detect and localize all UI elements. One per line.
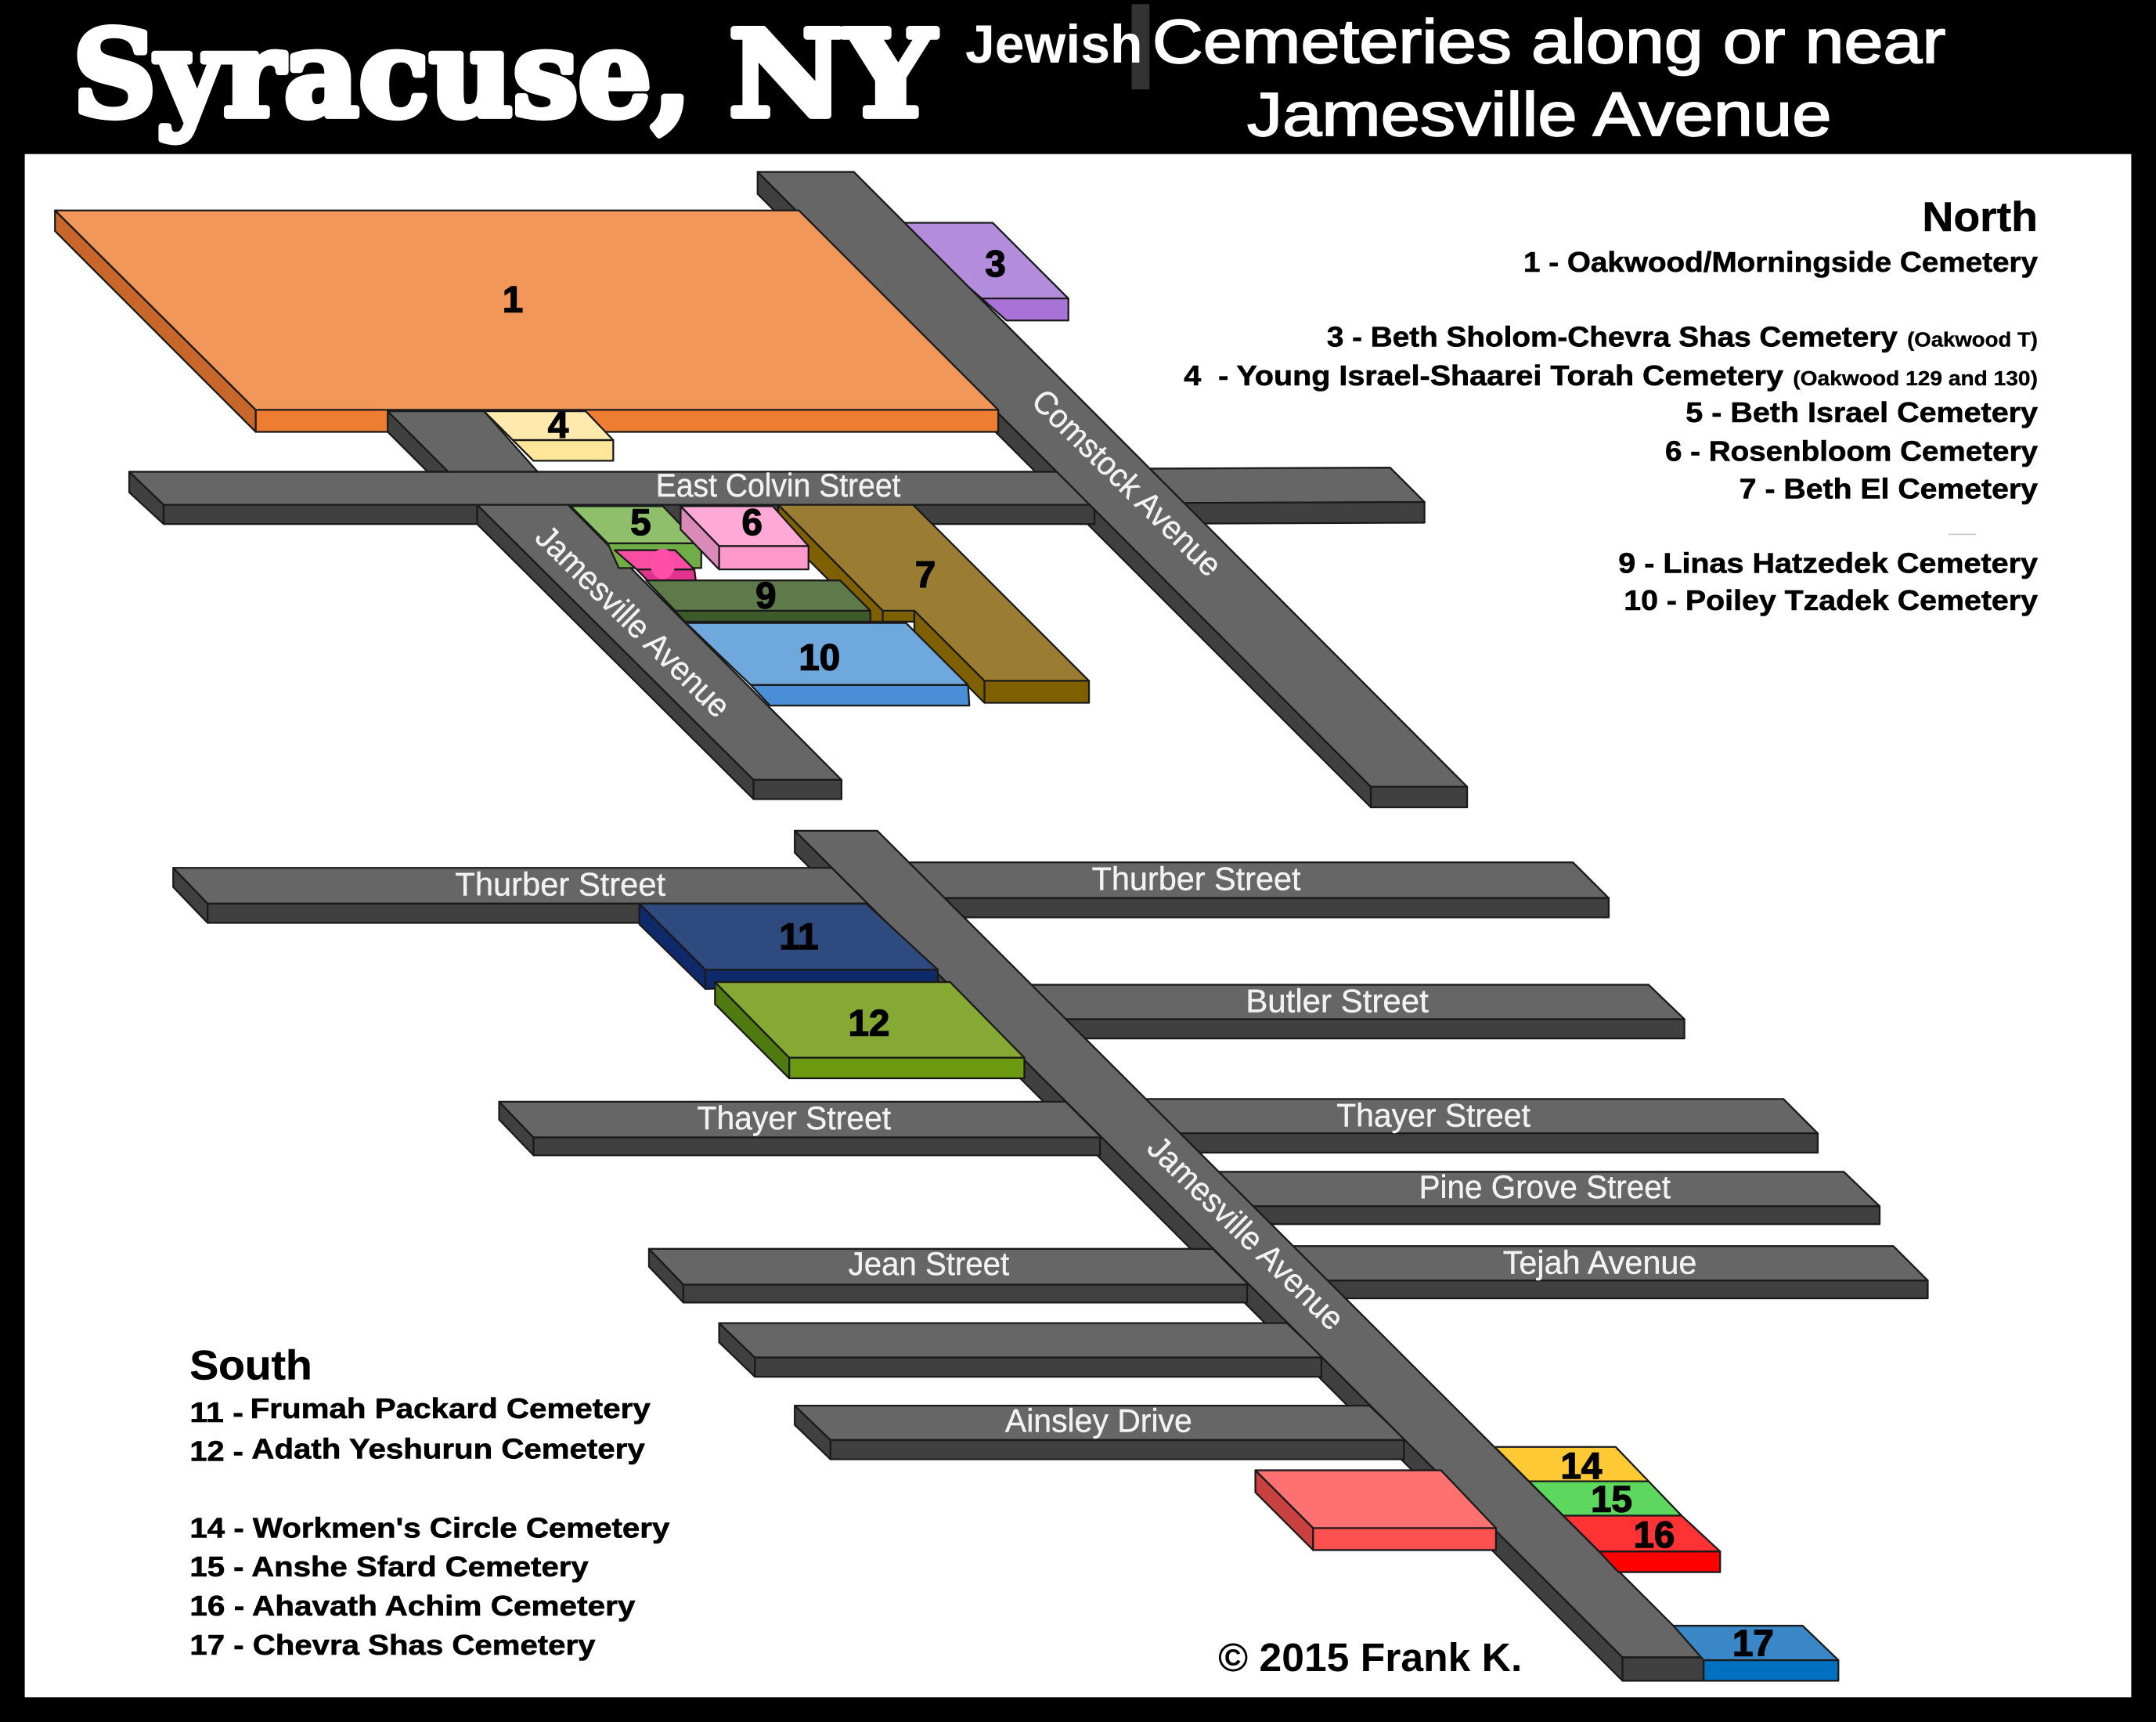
East Colvin Street right part bbox=[1045, 468, 1425, 524]
number 1: 1 bbox=[503, 280, 523, 321]
Jamesville Avenue north road bbox=[477, 505, 842, 799]
legend item 10: 10 - Poiley Tzadek Cemetery bbox=[1624, 584, 2038, 616]
subtitle line 1: Cemeteries along or near bbox=[1152, 6, 1945, 76]
unnamed street bbox=[719, 1323, 1323, 1377]
legend item 4 note: (Oakwood 129 and 130) bbox=[1793, 368, 2038, 390]
number 16: 16 bbox=[1634, 1514, 1675, 1556]
Thurber Street right part bbox=[825, 862, 1609, 918]
cemetery 4 block bbox=[484, 411, 613, 460]
number 10: 10 bbox=[799, 637, 840, 678]
subtitle line 2: Jamesville Avenue bbox=[1247, 79, 1831, 149]
header divider bar bbox=[1131, 4, 1149, 89]
legend number 11: 11 - bbox=[189, 1396, 243, 1428]
label: Jean Street: Jean Street bbox=[849, 1245, 1009, 1282]
heading: South: South bbox=[189, 1343, 312, 1389]
cemetery 15 block bbox=[1529, 1482, 1682, 1516]
Comstock Avenue left face bbox=[758, 172, 1371, 807]
cemetery 5 block bbox=[571, 506, 701, 568]
cemetery 13 block bbox=[1256, 1471, 1496, 1550]
number 15: 15 bbox=[1591, 1478, 1632, 1520]
title: Syracuse, NY: NY bbox=[729, 5, 937, 144]
legend item 7: 7 - Beth El Cemetery bbox=[1740, 473, 2038, 505]
Jamesville Avenue south left face bbox=[795, 831, 1623, 1680]
cemetery 14 block bbox=[1494, 1447, 1649, 1482]
Ainsley Drive bbox=[795, 1406, 1405, 1460]
label: Thayer Street right: Thayer Street bbox=[1336, 1096, 1530, 1133]
legend item 14: 14 - Workmen's Circle Cemetery bbox=[189, 1512, 669, 1544]
legend item 11: Frumah Packard Cemetery bbox=[251, 1392, 651, 1424]
number 5: 5 bbox=[630, 502, 651, 543]
north cemetery numbers bbox=[503, 244, 1006, 678]
legend item 4: 4 - Young Israel-Shaarei Torah Cemetery bbox=[1184, 359, 1783, 392]
stray marks bbox=[1949, 533, 1976, 535]
legend item 1: 1 - Oakwood/Morningside Cemetery bbox=[1523, 246, 2038, 278]
cemetery 1 block bbox=[55, 211, 998, 432]
legend item 9: 9 - Linas Hatzedek Cemetery bbox=[1618, 547, 2038, 579]
cemetery 12 block bbox=[715, 982, 1025, 1078]
Pine Grove Street bbox=[1141, 1171, 1880, 1224]
Thayer Street left part bbox=[499, 1102, 1101, 1155]
label: Tejah Avenue: Tejah Avenue bbox=[1503, 1244, 1696, 1280]
label: Thayer Street left: Thayer Street bbox=[697, 1099, 891, 1136]
Jean Street bbox=[649, 1249, 1249, 1302]
legend item 12: Adath Yeshurun Cemetery bbox=[251, 1433, 645, 1465]
north legend bbox=[1184, 194, 2038, 616]
legend item 5: 5 - Beth Israel Cemetery bbox=[1686, 396, 2038, 428]
number 3: 3 bbox=[985, 244, 1006, 285]
Tejah Avenue bbox=[1210, 1246, 1927, 1298]
label: Ainsley Drive: Ainsley Drive bbox=[1005, 1402, 1192, 1439]
title: Syracuse, NY: Syracuse, bbox=[73, 5, 691, 144]
label: Comstock Avenue: Comstock Avenue bbox=[1025, 382, 1229, 583]
number 9: 9 bbox=[755, 575, 776, 616]
number 14: 14 bbox=[1560, 1446, 1603, 1487]
cemetery 8 block bbox=[615, 549, 696, 580]
label: Jamesville Avenue south: Jamesville Avenue bbox=[1141, 1128, 1351, 1337]
number 11: 11 bbox=[779, 916, 819, 958]
south legend bbox=[189, 1343, 669, 1661]
cemetery 16 block bbox=[1563, 1516, 1720, 1572]
Thayer Street right part bbox=[1058, 1099, 1818, 1153]
Jamesville Avenue south road bbox=[795, 831, 1705, 1680]
label: Butler Street: Butler Street bbox=[1246, 983, 1429, 1020]
number 12: 12 bbox=[849, 1003, 889, 1045]
East Colvin Street left part bbox=[129, 471, 1094, 524]
label: Pine Grove Street: Pine Grove Street bbox=[1419, 1168, 1671, 1205]
south street labels bbox=[455, 860, 1696, 1439]
north street labels bbox=[528, 382, 1229, 724]
Thurber Street left part bbox=[173, 868, 867, 923]
north map bbox=[55, 172, 1467, 807]
legend item 6: 6 - Rosenbloom Cemetery bbox=[1665, 435, 2038, 467]
cemetery 9 block bbox=[646, 580, 871, 622]
number 17: 17 bbox=[1732, 1623, 1774, 1665]
cemetery 6 block bbox=[680, 506, 809, 569]
legend item 15: 15 - Anshe Sfard Cemetery bbox=[189, 1551, 589, 1583]
south cemetery numbers bbox=[779, 916, 1774, 1665]
number 7: 7 bbox=[915, 554, 936, 596]
legend item 16: 16 - Ahavath Achim Cemetery bbox=[189, 1590, 635, 1622]
copyright: © 2015 Frank K. bbox=[1218, 1635, 1522, 1680]
number 6: 6 bbox=[742, 502, 763, 543]
header bbox=[73, 4, 1945, 149]
label: Jamesville Avenue north: Jamesville Avenue bbox=[528, 518, 737, 724]
label: East Colvin Street: East Colvin Street bbox=[656, 467, 901, 504]
label: Thurber Street right: Thurber Street bbox=[1092, 860, 1301, 897]
Butler Street bbox=[962, 985, 1685, 1038]
legend item 3: 3 - Beth Sholom-Chevra Shas Cemetery bbox=[1327, 321, 1898, 353]
cemetery 10 block bbox=[686, 623, 969, 706]
Comstock Avenue road bbox=[758, 172, 1467, 807]
cemetery 7 block bbox=[778, 505, 1089, 703]
number 4: 4 bbox=[548, 405, 569, 446]
Jamesville Avenue north stub bbox=[388, 411, 538, 471]
heading: North: North bbox=[1922, 194, 2038, 240]
legend item 3 note: (Oakwood T) bbox=[1907, 330, 2038, 352]
south map bbox=[173, 831, 1927, 1680]
legend item 17: 17 - Chevra Shas Cemetery bbox=[189, 1629, 596, 1661]
legend number 12: 12 - bbox=[189, 1435, 243, 1467]
cemetery 3 block bbox=[894, 223, 1069, 320]
cemetery 11 block bbox=[640, 904, 938, 989]
subtitle word: Jewish: Jewish bbox=[965, 14, 1143, 74]
cemetery 17 block bbox=[1674, 1626, 1838, 1680]
label: Thurber Street left: Thurber Street bbox=[455, 865, 665, 902]
